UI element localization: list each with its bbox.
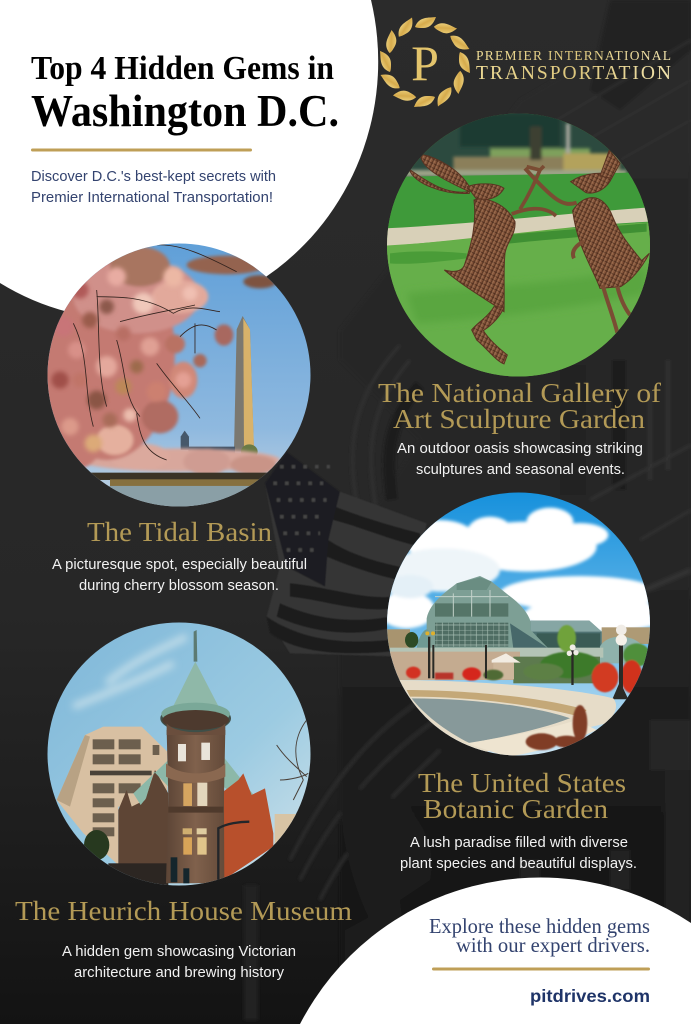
photo: botanic garden conservatory <box>387 492 650 756</box>
photo: heurich house <box>40 620 320 890</box>
heading: botanic garden <box>418 768 626 824</box>
title: Top 4 Hidden Gems in <box>31 50 334 87</box>
description: tidal basin: A picturesque spot, especially beautiful <box>52 557 307 573</box>
description: heurich house: A hidden gem showcasing Victorian <box>62 944 296 960</box>
icon: gold wreath with P: P <box>411 35 439 91</box>
heading: national gallery <box>378 378 661 434</box>
company name: TRANSPORTATION <box>476 63 671 84</box>
description: heurich house: architecture and brewing history <box>74 965 285 981</box>
intro text: Discover D.C.'s best-kept secrets with <box>31 169 276 185</box>
call to action text: Explore these hidden gems <box>429 914 650 938</box>
description: national gallery: An outdoor oasis showcasing striking <box>397 441 643 457</box>
photo: tidal basin cherry blossoms <box>48 244 310 506</box>
photo: national gallery sculpture garden hares <box>387 114 650 376</box>
title: Washington D.C. <box>31 86 339 136</box>
icon: gold wreath with P <box>380 17 470 107</box>
heading: botanic garden: Botanic Garden <box>423 794 609 824</box>
heading: heurich house: The Heurich House Museum <box>15 896 352 926</box>
right hare <box>571 150 649 288</box>
description: tidal basin <box>52 557 307 594</box>
logo <box>380 17 671 107</box>
call to action text: with our expert drivers. <box>456 933 650 957</box>
title divider <box>31 148 252 152</box>
company name <box>476 48 671 84</box>
website: pitdrives.com <box>530 986 650 1006</box>
heading: botanic garden: The United States <box>418 768 626 798</box>
description: botanic garden: A lush paradise filled with diverse <box>410 835 628 851</box>
intro text: Premier International Transportation! <box>31 190 273 206</box>
description: heurich house <box>62 944 296 981</box>
white header panel <box>0 0 378 320</box>
description: national gallery <box>397 441 643 478</box>
description: botanic garden: plant species and beautiful displays. <box>400 856 637 872</box>
background: capitol building architecture <box>244 0 691 1024</box>
description: botanic garden <box>400 835 637 872</box>
white footer panel <box>300 878 691 1024</box>
footer divider <box>432 968 650 970</box>
heading: national gallery: The National Gallery of <box>378 378 661 408</box>
heading: national gallery: Art Sculpture Garden <box>393 404 646 434</box>
intro text <box>31 169 276 206</box>
heading: tidal basin: The Tidal Basin <box>87 517 273 547</box>
title <box>31 50 339 136</box>
background: american flag <box>265 452 427 657</box>
company name: PREMIER INTERNATIONAL <box>476 48 671 63</box>
call to action text <box>429 914 650 957</box>
description: national gallery: sculptures and seasonal events. <box>416 462 625 478</box>
description: tidal basin: during cherry blossom season. <box>79 578 279 594</box>
left hare <box>409 154 515 364</box>
